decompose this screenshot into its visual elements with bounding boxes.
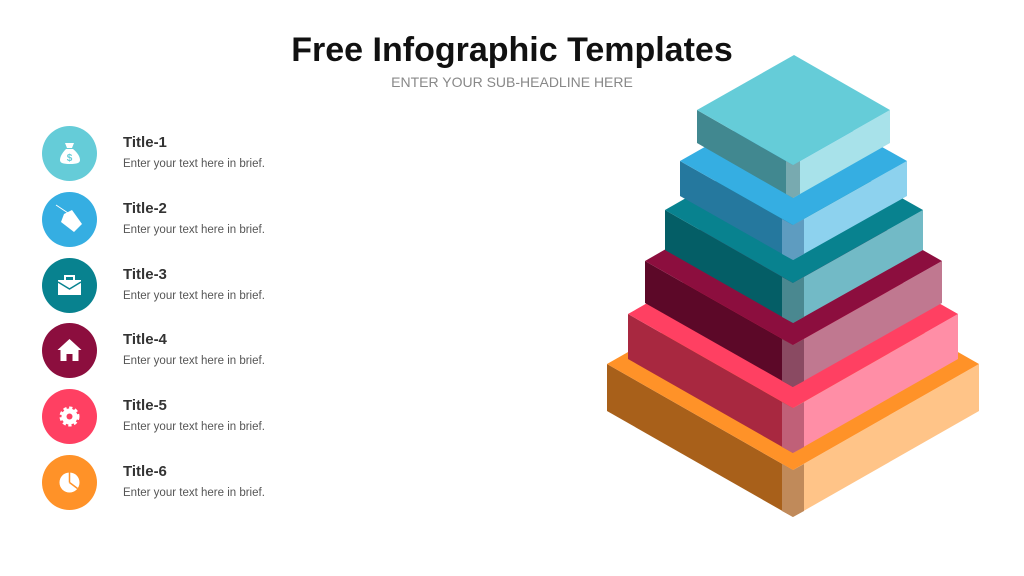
icon: house [42, 323, 97, 378]
item 1: Enter your text here in brief. [123, 158, 265, 170]
icon: money bag [42, 126, 97, 181]
item 6: Title-6 [123, 463, 167, 480]
item 5 [42, 389, 265, 444]
layer 5 pink [628, 220, 958, 453]
item 2: Enter your text here in brief. [123, 224, 265, 236]
item 3 [42, 258, 265, 313]
layer 1 top cyan [697, 55, 890, 198]
item 4: Enter your text here in brief. [123, 355, 265, 367]
item 1 [42, 126, 265, 181]
layer 4 maroon [645, 176, 942, 387]
item 5: Title-5 [123, 397, 167, 414]
item 4 [42, 323, 265, 378]
subtitle: ENTER YOUR SUB-HEADLINE HERE [391, 74, 633, 90]
item 6: Enter your text here in brief. [123, 487, 265, 499]
icon: gear [42, 389, 97, 444]
item 4: Title-4 [123, 331, 167, 348]
icon: money bag: $ [67, 153, 73, 164]
layer 3 teal [665, 137, 923, 323]
layer 6 orange [607, 258, 979, 517]
title: Free Infographic Templates [291, 31, 733, 69]
icon: tag [42, 192, 97, 247]
item 6 [42, 455, 265, 510]
icon: briefcase [42, 258, 97, 313]
item 1: Title-1 [123, 134, 167, 151]
item 5: Enter your text here in brief. [123, 421, 265, 433]
item 3: Enter your text here in brief. [123, 290, 265, 302]
item 2: Title-2 [123, 200, 167, 217]
layer 2 blue [680, 97, 907, 260]
item 3: Title-3 [123, 266, 167, 283]
item 2 [42, 192, 265, 247]
icon: pie chart [42, 455, 97, 510]
